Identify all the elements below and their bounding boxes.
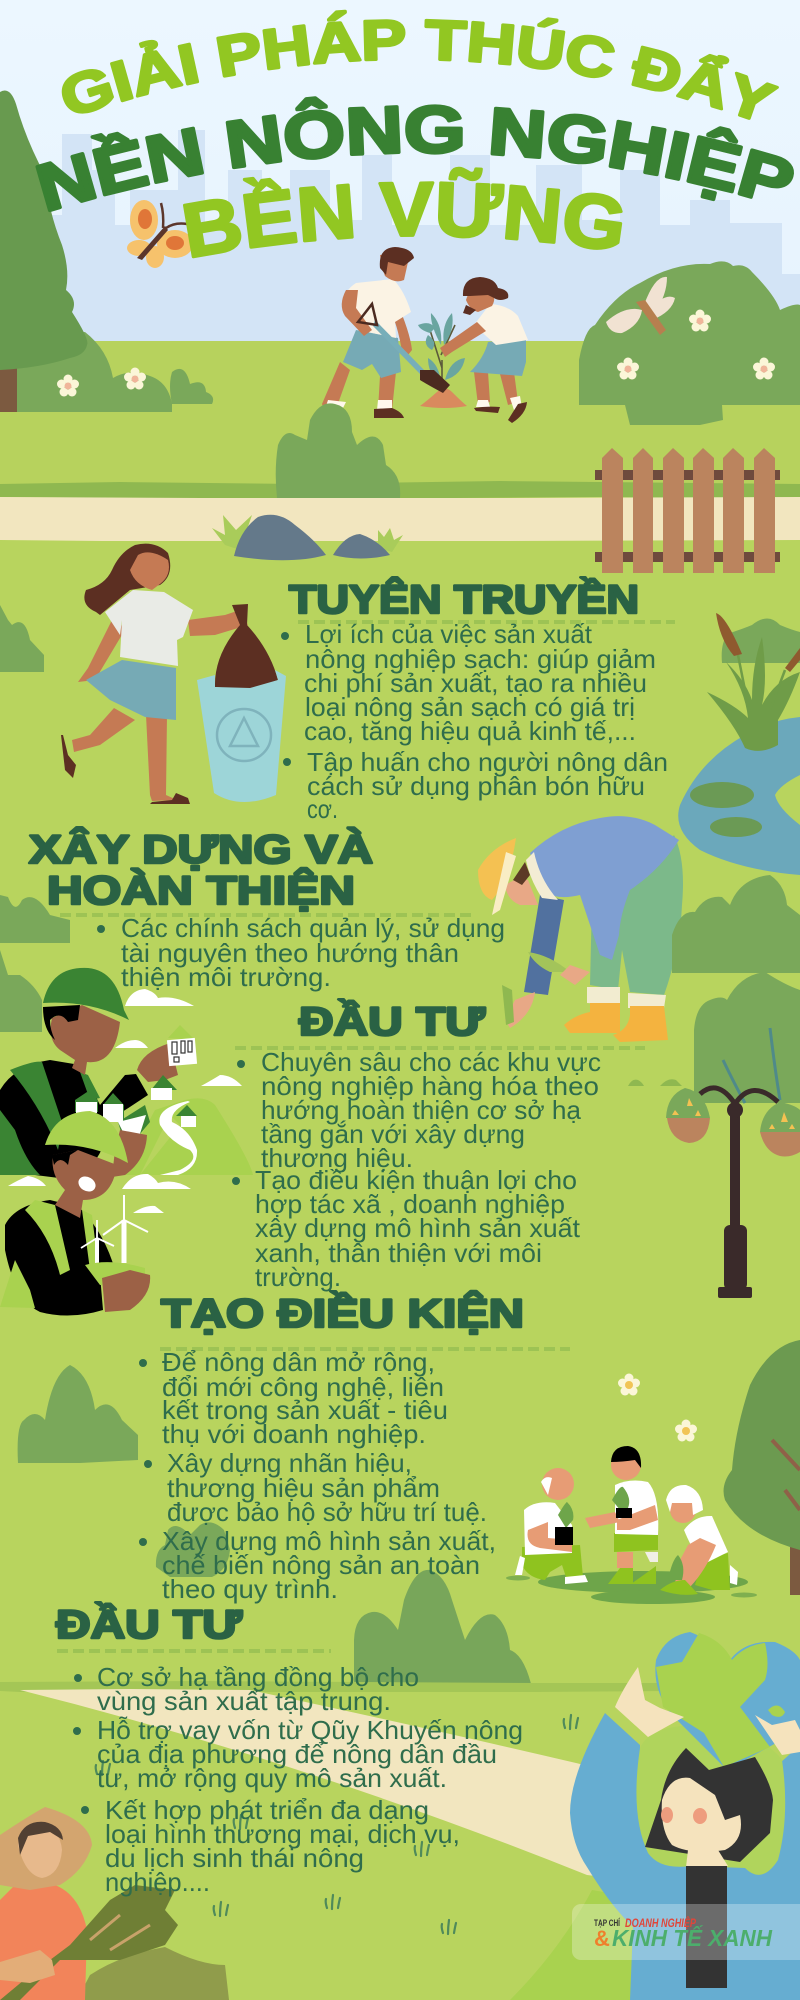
bullet text: vùng sản xuất tập trung. [97,1686,391,1716]
bullet text: cách sử dụng phân bón hữu [307,771,645,801]
title [36,10,794,258]
bullet text: Cơ sở hạ tầng đồng bộ cho [97,1662,419,1692]
girl skirt [470,338,526,376]
bullet text: Lợi ích của việc sản xuất [305,619,593,649]
bullet text [281,619,668,824]
face [662,1778,741,1852]
lower grass strip [0,1681,800,1692]
watermark logo: & [594,1926,610,1951]
tree: left [0,90,87,412]
illustration: farmer bending over [478,816,683,1042]
street lamp with flower pots [666,1088,800,1298]
worker 1 hand [137,1043,178,1082]
illustration: girl with recycling bin [61,544,286,804]
bullet text: nghiệp.... [105,1867,210,1897]
boy shirt [344,279,411,338]
watermark logo: DOANH NGHIỆP [625,1915,697,1930]
illustration: workers with miniature village [0,968,253,1316]
soil mound [420,388,467,408]
black top [686,1866,727,1988]
boy front arm [342,290,372,336]
bullet text: thiện môi trường. [121,962,331,992]
grass tufts [96,1715,786,1934]
pond [678,717,800,875]
heading: ĐẦU TƯ [56,1601,243,1647]
bullet text: Kết hợp phát triển đa dạng [105,1795,429,1825]
hands [615,1667,684,1737]
girl shirt [474,304,528,345]
shirt [105,590,193,666]
bullet text: hướng hoàn thiện cơ sở hạ [261,1095,582,1125]
boy [585,1446,658,1584]
face [130,552,169,590]
flowers: right bush [617,310,775,380]
girl shoes [474,402,527,423]
city skyline [0,130,800,345]
bush: left middle [0,895,70,943]
heading: XÂY DỰNG VÀ [29,826,373,872]
trousers [590,835,683,995]
worker 2 head [52,1150,117,1218]
hair [645,1748,773,1862]
bullet text [139,1347,496,1604]
dirt road [0,497,800,542]
bush: right lower with stems [694,972,800,1103]
fence [595,448,780,573]
stars [672,1098,795,1129]
face [18,1825,62,1878]
sweater [530,816,679,960]
bullet text: tư, mở rộng quy mô sản xuất. [97,1763,447,1793]
illustration: community planting group [506,1446,757,1604]
recycling bin [197,670,286,802]
arm: bag [188,610,248,636]
bullet text [97,913,505,992]
heading: ĐẦU TƯ [299,998,486,1044]
bullet text: cơ. [307,794,338,824]
bullet text: cao, tăng hiệu quả kinh tế,... [304,716,636,746]
back leg and foot [72,708,135,752]
heading [29,826,373,913]
house card [167,1038,197,1066]
bullet text: xanh, thân thiện với môi [255,1238,542,1268]
bush: large lower [354,1570,533,1692]
bullet text: nông nghiệp hàng hóa theo [261,1071,599,1101]
bullet text: thương hiệu sản phẩm [167,1473,440,1503]
head and scarf [505,878,538,905]
jacket and raised arms [570,1713,800,2000]
bullet text: du lịch sinh thái nông [105,1843,364,1873]
bullet text: thương hiệu. [261,1143,413,1173]
winding road [159,1101,197,1175]
bullet text: tầng gắn với xây dựng [261,1119,525,1149]
bullet text: xây dựng mô hình sản xuất [255,1213,581,1243]
boy head [380,254,408,281]
worker 1 torso [0,1060,148,1180]
recycling symbol [217,709,271,761]
worker 2 hands [102,1270,150,1312]
bullet text: loại hình thương mại, dịch vụ, [105,1819,460,1849]
ground shadow [538,1571,748,1593]
bullet text: Xây dựng nhãn hiệu, [167,1448,412,1478]
boy shoes [312,408,404,420]
bag [215,604,278,690]
small shrub marks [628,1079,682,1086]
bush: left upper [0,605,44,672]
reeds and cattails [707,613,800,751]
icon: butterfly [127,200,193,268]
bullet text [73,1662,523,1897]
green inner oval [636,1725,785,1875]
front leg [146,715,177,801]
girl arms [440,322,486,357]
straw hat [0,1807,92,1890]
bush behind reeds [722,618,800,663]
girl head [466,286,494,312]
arm: left [78,620,126,682]
boots [564,1003,668,1042]
sapling [430,325,455,392]
bullet text: của địa phương để nông dân đầu [97,1739,497,1769]
boy back arm [388,300,412,355]
flowers: left bush [57,368,146,396]
globe [655,1632,800,1767]
bullet text: Các chính sách quản lý, sử dụng [121,913,505,943]
heading: HOÀN THIỆN [47,867,355,913]
bullet text: trường. [255,1262,341,1292]
bullet text: Tập huấn cho người nông dân [307,747,668,777]
seedlings and hand [528,952,570,972]
section: đầu tư 1 [232,998,645,1292]
hair [84,544,170,615]
houses [75,1075,197,1140]
old man [515,1468,588,1584]
bullet text: Xây dựng mô hình sản xuất, [162,1526,496,1556]
left pot [666,1088,710,1118]
lily pads [690,782,762,837]
windmills [81,1195,148,1268]
bullet text: đổi mới công nghệ, liên [162,1372,444,1402]
worker 1 head [51,1005,120,1075]
illustration: farmer with rice [0,1807,229,2000]
grass mound [77,1947,229,2000]
shovel [373,320,426,376]
neck [686,1850,728,1867]
sleeve left [524,895,564,995]
bush: left [0,332,213,412]
bullet text: loại nông sản sạch có giá trị [305,692,635,722]
clouds [8,989,242,1213]
bullet text: hợp tác xã , doanh nghiệp [255,1189,565,1219]
woman [660,1485,738,1595]
bullet text: Để nông dân mở rộng, [162,1347,435,1377]
worker 2 helmet [45,1111,128,1163]
bullet text [232,1047,601,1292]
illustration: woman holding the earth [510,1632,800,2000]
worker 2 vest [0,1200,98,1308]
section: tạo điều kiện [139,1290,570,1604]
rice bundle [0,1885,178,2000]
dark grass strip [0,481,800,499]
heading: TUYÊN TRUYỀN [289,576,639,622]
bullet text: chế biến nông sản an toàn [162,1550,480,1580]
watermark logo: TẠP CHÍ [594,1918,620,1928]
skirt [86,660,176,720]
bullet text: được bảo hộ sở hữu trí tuệ. [167,1497,487,1527]
boot cuffs [587,987,666,1008]
title: GIẢI PHÁP THÚC ĐẨY [62,10,779,120]
bullet text: chi phí sản xuất, tạo ra nhiều [304,668,647,698]
bullet text: Tạo điều kiện thuận lợi cho [255,1165,577,1195]
title: BỀN VỮNG [183,166,623,258]
worker 1 helmet [43,968,129,1020]
worker 2 hand behind [112,1130,147,1177]
sandy path [20,1689,800,1900]
bush: centre [276,403,400,498]
bush: right middle [672,875,800,973]
bullet text: thụ với doanh nghiệp. [162,1419,426,1449]
bullet text: Hỗ trợ vay vốn từ Qũy Khuyến nông [97,1715,523,1745]
background green shape [510,1890,650,2000]
bush: lower left [18,1365,138,1463]
bullet text: tài nguyên theo hướng thân [121,938,459,968]
section: xây dựng và hoàn thiện [29,826,505,992]
tree: right lower [724,1340,800,1595]
watermark logo: KINH TẾ XANH [612,1924,772,1951]
right pot [760,1102,800,1132]
worker 1 vest [0,1062,100,1175]
boy legs [322,362,396,415]
lower grass [0,541,800,2000]
title: NỀN NÔNG NGHIỆP [36,96,794,212]
bush behind text [156,1522,230,1577]
watermark logo [572,1904,800,1960]
bullet text: Chuyên sâu cho các khu vực [261,1047,601,1077]
sky background [0,0,800,345]
rocks with grass tufts [212,515,403,560]
bullet text: kết trong sản xuất - tiêu [162,1395,448,1425]
upper grass [0,341,800,486]
orange shirt [0,1880,87,2000]
miniature hill [85,1262,145,1285]
bush: left lower [0,950,42,1032]
heading: TẠO ĐIỀU KIỆN [161,1290,524,1336]
bush: right [579,261,800,425]
cheeks [661,1807,707,1824]
girl legs [474,372,518,405]
bullet text: theo quy trình. [162,1574,338,1604]
worker 2 torso [5,1200,115,1316]
straw hat [478,838,516,900]
hills [120,1098,253,1175]
section: tuyên truyền [281,576,675,824]
illustration: children planting a tree [312,247,528,423]
arm and hand [0,1950,55,1983]
boy shorts [343,330,401,378]
bullet text: nông nghiệp sạch: giúp giảm [305,644,656,674]
icon: dragonfly [606,277,675,335]
flowers: daisies [618,1374,697,1442]
section: đầu tư 2 [56,1601,523,1897]
